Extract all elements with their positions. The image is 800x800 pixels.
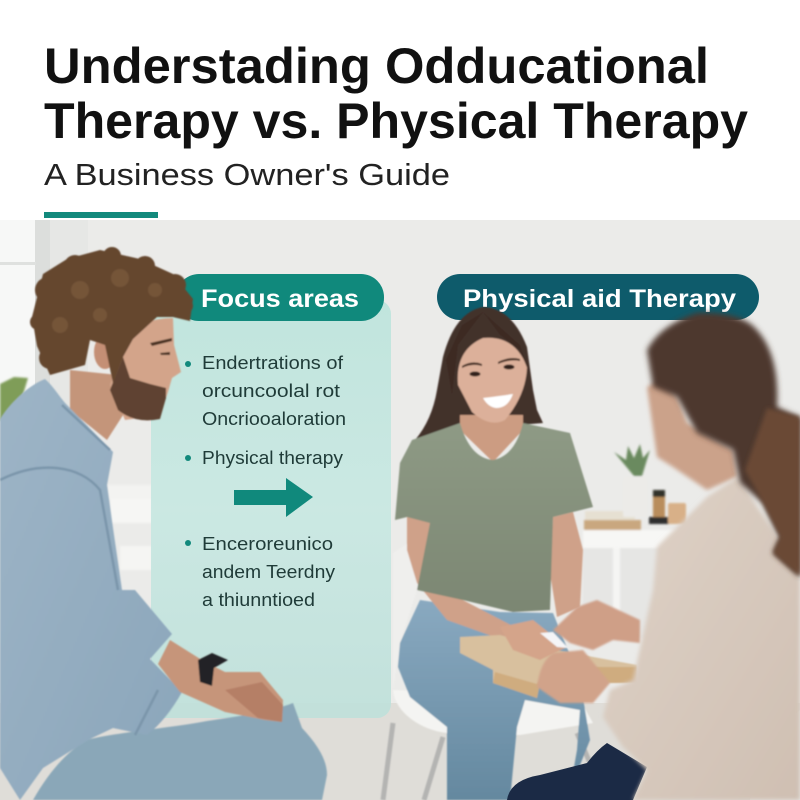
- face: [458, 338, 527, 423]
- ponytail: [745, 408, 800, 577]
- bullet list item 1: [185, 353, 346, 429]
- shirt collar and fold lines: [0, 405, 158, 735]
- person: left man: [0, 247, 327, 800]
- panel heading pill: physical therapy: Physical aid Therapy: [463, 285, 736, 313]
- hair: [647, 313, 800, 577]
- title: [44, 38, 748, 149]
- upper hand: [553, 600, 640, 650]
- title: Therapy vs. Physical Therapy: [44, 93, 748, 149]
- bullet list item 2: Physical therapy: [202, 448, 343, 468]
- shirt: [0, 379, 182, 800]
- photo background: [0, 220, 800, 800]
- accent bar: [44, 212, 158, 218]
- lower hand: [537, 650, 610, 703]
- eyes and smile: [462, 358, 520, 408]
- neck: [70, 370, 125, 440]
- icon: window plant: [0, 377, 28, 421]
- eye and brow: [150, 338, 172, 355]
- bullet list item 1: Endertrations of: [202, 353, 344, 373]
- header background: [0, 0, 800, 220]
- chair: [393, 542, 420, 690]
- arms: [407, 517, 557, 657]
- back desk left: [108, 485, 152, 570]
- jeans: [398, 600, 590, 800]
- hair highlights: [52, 269, 162, 333]
- panel heading: focus areas: [176, 274, 384, 321]
- watch: [198, 653, 228, 686]
- face: [647, 380, 737, 490]
- panel heading pill: physical therapy: [437, 274, 759, 320]
- white paper: [540, 632, 568, 648]
- hair: [30, 247, 193, 383]
- panel: focus areas: [151, 274, 391, 718]
- dark trousers: [507, 743, 647, 800]
- box: [460, 635, 637, 698]
- person: right woman: [507, 313, 800, 800]
- arrow: [234, 478, 313, 517]
- bullet list item 3: Enceroreunico: [202, 534, 333, 554]
- bullet list item 3: a thiunntioed: [202, 590, 315, 610]
- beard: [110, 357, 166, 420]
- jeans: [33, 703, 327, 800]
- tshirt: [395, 423, 593, 612]
- woman hand: [500, 620, 567, 660]
- bullet list item 3: andem Teerdny: [202, 562, 335, 582]
- ear: [94, 335, 116, 369]
- bullet list item 3: [185, 534, 335, 610]
- cardigan: [603, 477, 800, 800]
- bullet list item 1: Oncriooaloration: [202, 409, 346, 429]
- title: Understading Odducational: [44, 38, 709, 94]
- hair parting: [446, 312, 530, 395]
- subtitle: A Business Owner's Guide: [44, 157, 450, 192]
- neck: [460, 415, 523, 462]
- chair: [750, 710, 800, 800]
- forearm and hands: [158, 640, 283, 722]
- panel heading: focus areas: Focus areas: [201, 285, 359, 313]
- hair back: [415, 307, 543, 440]
- person: woman center: [383, 307, 637, 800]
- bullet list item 1: orcuncoolal rot: [202, 381, 340, 401]
- floor: [0, 703, 800, 800]
- face: [110, 318, 181, 420]
- back desk right: [583, 444, 693, 638]
